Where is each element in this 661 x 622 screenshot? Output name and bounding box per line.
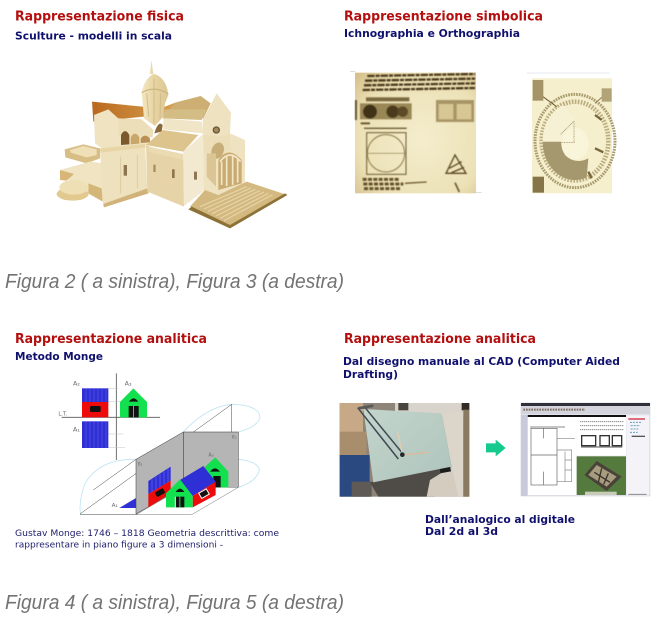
house 3D — [180, 466, 216, 496]
callout: Dall'analogico al digitale: Dall’analogico al digitale — [425, 514, 575, 526]
note: Gustav Monge — [15, 529, 279, 550]
arrow: analog to digital — [486, 440, 506, 456]
subheading: Dal disegno manuale al CAD: Dal disegno manuale al CAD (Computer Aided — [343, 356, 620, 368]
manuscript sketch: ionic capital — [350, 71, 482, 193]
vertical plane left — [136, 432, 183, 514]
drawing board — [363, 409, 452, 482]
heading: Rappresentazione analitica (destra): Rappresentazione analitica — [344, 332, 536, 347]
subheading: Ichnographia e Orthographia: Ichnographia e Orthographia — [344, 28, 520, 40]
heading: Rappresentazione analitica (sinistra): Rappresentazione analitica — [15, 332, 207, 347]
drafting head scales — [398, 432, 402, 454]
subheading: Sculture - modelli in scala: Sculture - modelli in scala — [15, 30, 172, 42]
orthographic projection axes: A₃ — [125, 381, 132, 388]
side view: green house — [120, 388, 147, 417]
photo: drafting table — [340, 403, 469, 497]
house projection on right plane — [205, 457, 228, 487]
house projection on left plane — [148, 467, 171, 494]
side panel — [627, 416, 649, 496]
elevation view — [577, 417, 626, 456]
projected roof on ground — [119, 498, 136, 508]
front view: blue and red — [82, 388, 108, 402]
note: Gustav Monge: rappresentare in piano figure a 3 dimensioni - — [15, 540, 223, 550]
top view: blue roof — [82, 421, 108, 448]
heading: Rappresentazione simbolica: Rappresentazione simbolica — [344, 10, 543, 24]
subheading: Metodo Monge: Metodo Monge — [15, 351, 103, 363]
Monge projection diagram: A₁ — [112, 503, 118, 509]
construction arcs — [80, 404, 260, 514]
manuscript sketch: amphitheatre plan — [527, 73, 615, 193]
Monge projection diagram — [58, 373, 260, 515]
callout: Dall'analogico al digitale — [425, 514, 575, 538]
scale model of a church — [57, 60, 287, 228]
screenshot: CAD software — [521, 403, 650, 496]
Monge projection diagram: π₁ — [138, 461, 143, 467]
orthographic projection axes: A₂ — [73, 381, 80, 388]
floor plan — [530, 427, 575, 485]
caption: Figura 4 e 5: Figura 4 ( a sinistra), Figura 5 (a destra) — [5, 592, 344, 614]
orthographic projection axes: A₁ — [73, 426, 80, 433]
parallel arm — [358, 408, 403, 459]
heading: Rappresentazione fisica: Rappresentazione fisica — [15, 10, 184, 24]
subheading: Dal disegno manuale al CAD: Drafting) — [343, 369, 398, 381]
callout: Dall'analogico al digitale: Dal 2d al 3d — [425, 526, 498, 538]
orthographic projection axes: L.T. — [58, 412, 68, 418]
caption: Figura 2 e 3: Figura 2 ( a sinistra), Figura 3 (a destra) — [5, 271, 344, 293]
ground plane — [136, 487, 238, 515]
Monge projection diagram: π₂ — [232, 434, 237, 440]
subheading: Dal disegno manuale al CAD — [343, 356, 620, 381]
vertical plane right — [183, 432, 238, 487]
3D model view — [577, 456, 626, 495]
Monge projection diagram: A₃ — [208, 453, 214, 459]
orthographic projection axes — [58, 373, 160, 460]
note: Gustav Monge: Gustav Monge: 1746 – 1818 Geometria descrittiva: come — [15, 529, 279, 539]
